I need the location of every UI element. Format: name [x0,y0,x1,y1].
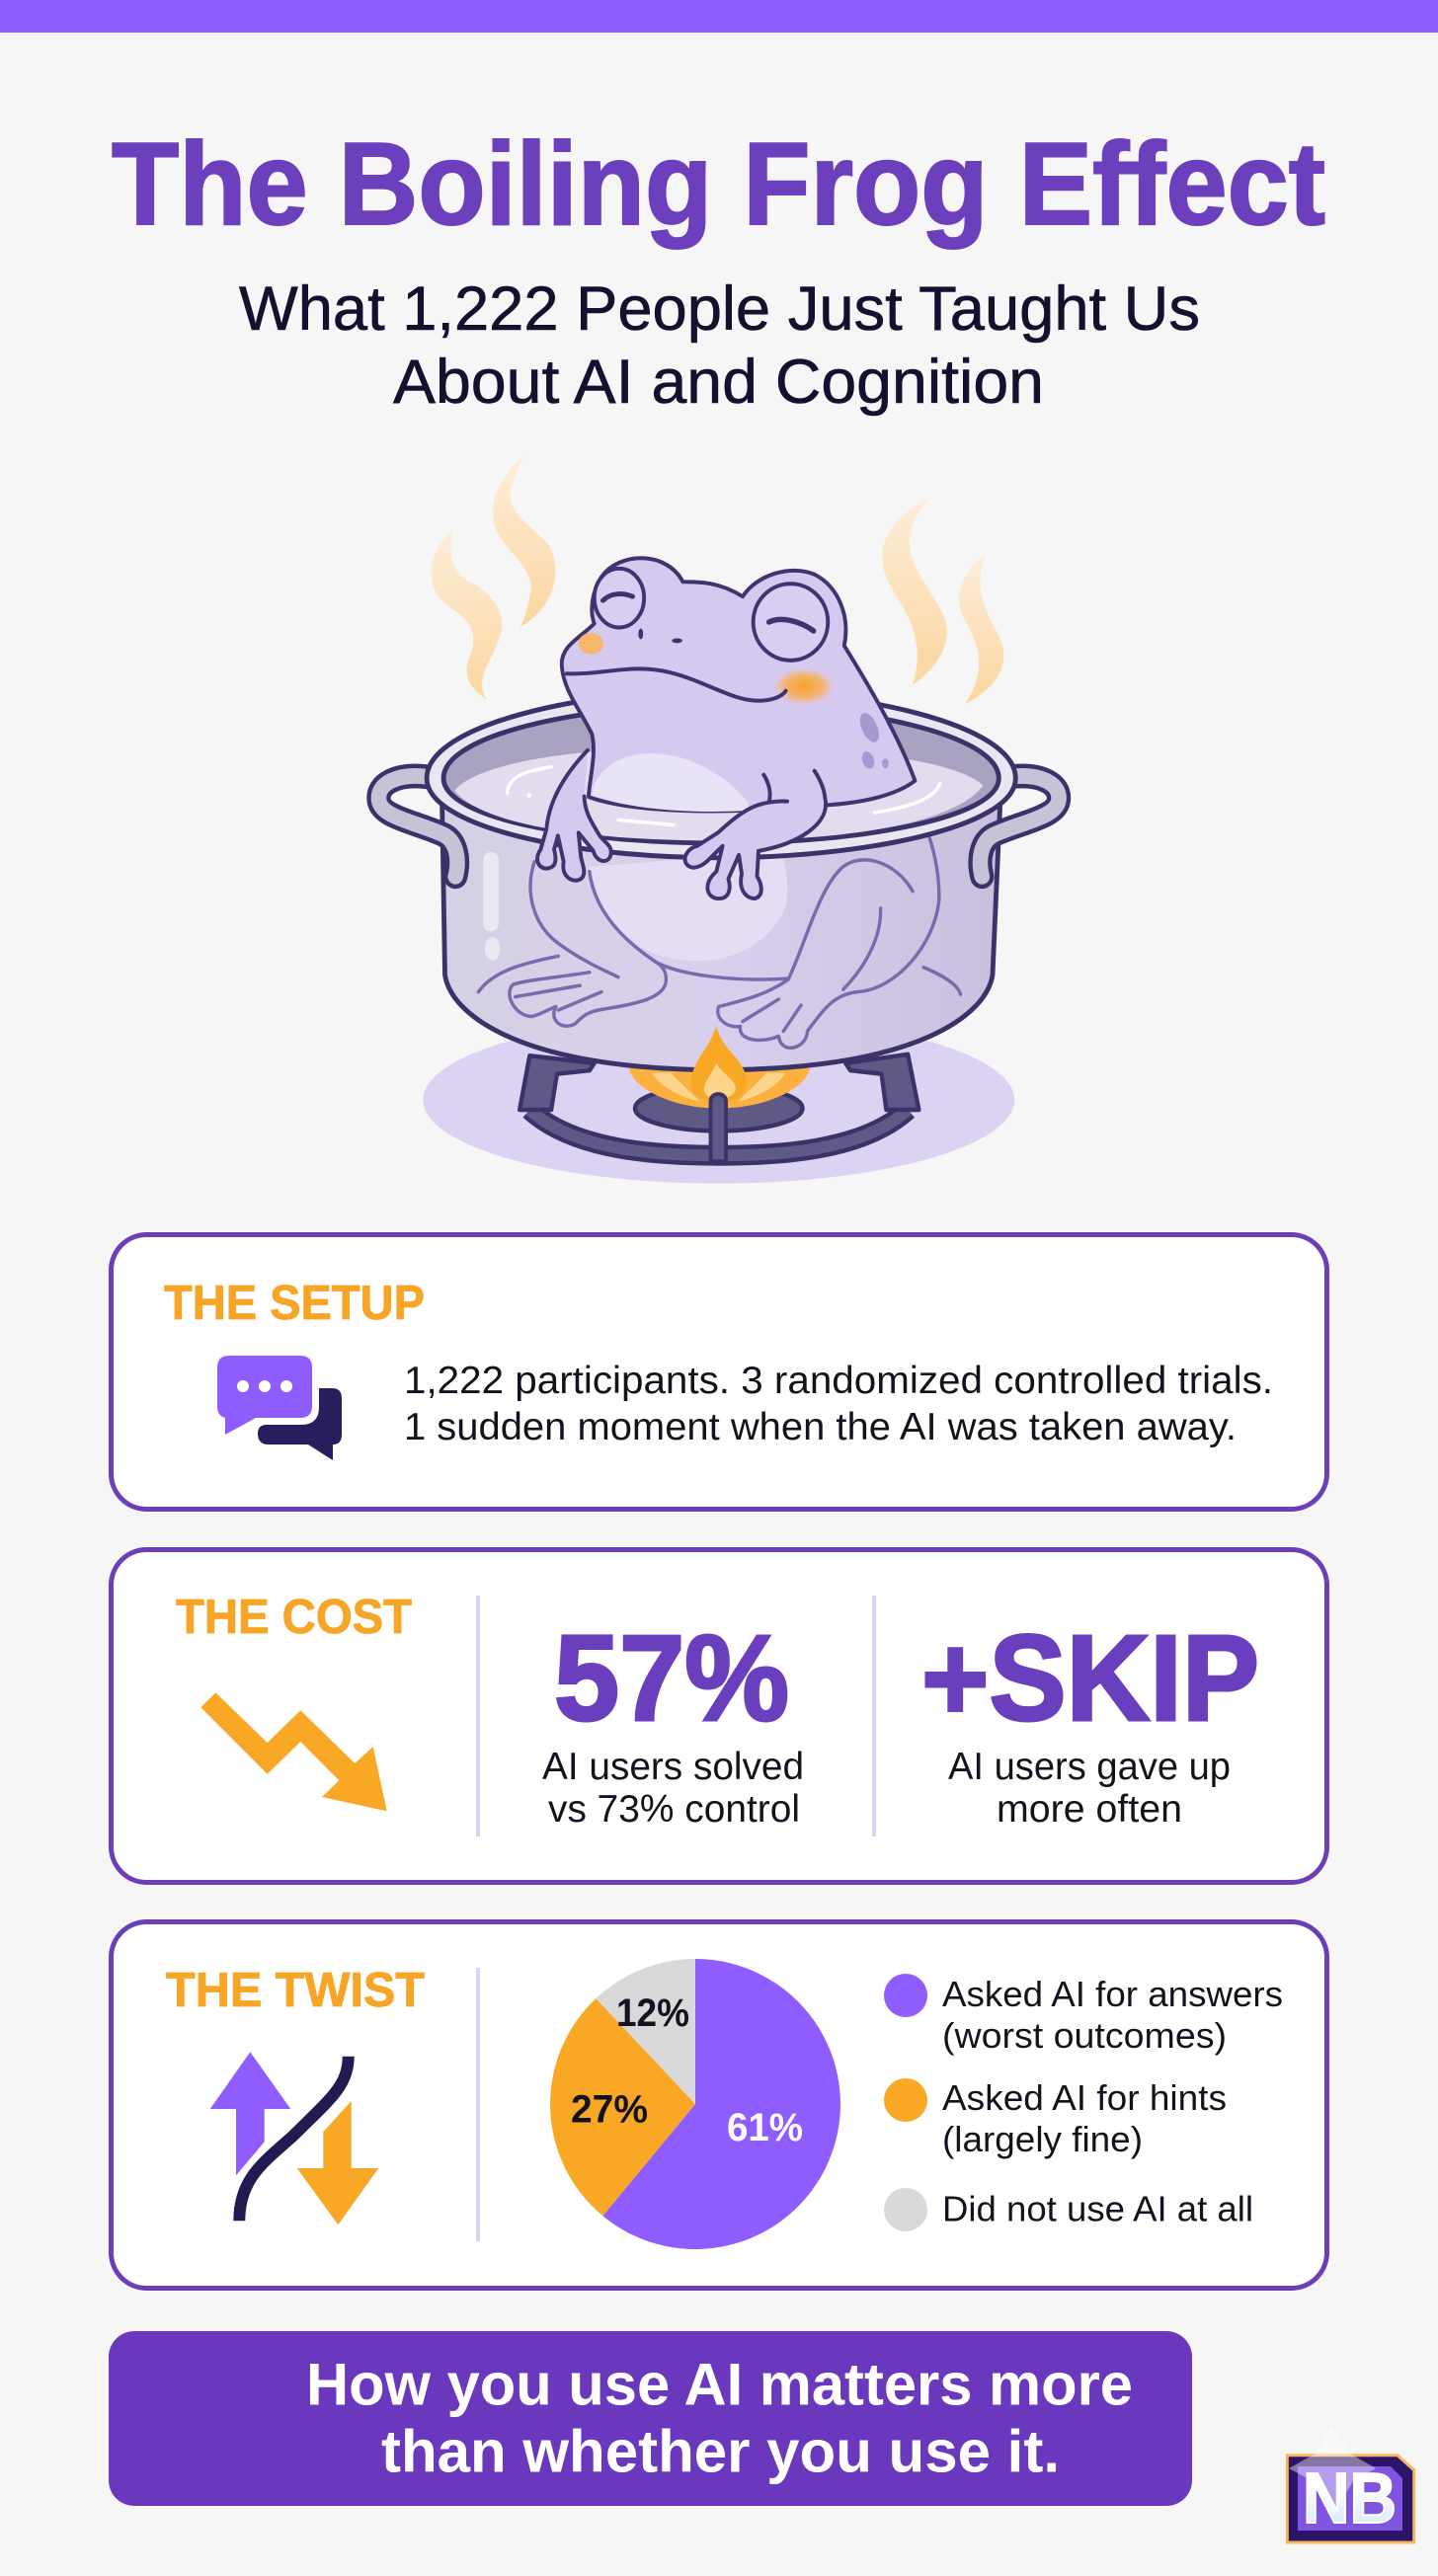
icon: falling zigzag arrow [200,1692,387,1811]
stat: +skip: +SKIP [921,1611,1259,1747]
stat: 57%: vs 73% control [548,1788,800,1831]
frog eyes [595,569,644,627]
heading: the setup: THE SETUP [164,1277,425,1330]
subtitle: What 1,222 People Just Taught Us [239,274,1200,344]
cheeks and spots [773,667,835,705]
stat: 57%: AI users solved [542,1746,804,1788]
frog upper body [537,558,915,898]
banner: conclusion [109,2331,1192,2506]
frog mouth [567,668,786,701]
subtitle: About AI and Cognition [393,348,1044,417]
setup text [404,1360,1273,1448]
pot handles [378,776,1059,877]
pot rim and water [427,690,1015,858]
panel: the twist [111,1921,1327,2289]
panel: the cost [111,1550,1327,1882]
banner: conclusion: How you use AI matters more [306,2352,1133,2418]
left arm [537,750,611,881]
pot body [442,802,1000,1070]
submerged frog [478,837,961,1048]
burner grate [519,1054,919,1155]
setup text: 1 sudden moment when the AI was taken away. [404,1406,1237,1448]
logo: NB badge: NB [1303,2459,1397,2538]
frog belly [592,753,749,812]
top accent bar [0,0,1438,33]
pie chart: 12% [616,1991,689,2035]
burner shadow [423,1016,1014,1184]
pie chart: 27% [571,2087,648,2131]
stat: +skip [921,1611,1259,1831]
pie chart: 61% [727,2106,803,2149]
illustration: frog in a pot on a burner [366,455,1071,1184]
banner: conclusion: than whether you use it. [381,2419,1060,2485]
subtitle [239,274,1200,417]
legend item: answers [884,1974,1283,2056]
legend item: hints: Asked AI for hints [942,2077,1227,2118]
legend item: no AI: Did not use AI at all [942,2188,1253,2229]
flame [691,1026,747,1161]
legend item: answers: Asked AI for answers [942,1974,1283,2014]
pot highlights [483,852,500,961]
legend item: hints [884,2077,1227,2159]
icon: chat bubbles [217,1356,342,1460]
title: The Boiling Frog Effect [112,118,1325,250]
steam wisps [432,455,1003,704]
logo: NB badge [1287,2426,1414,2542]
stat: 57%: 57% [554,1611,789,1747]
legend item: hints: (largely fine) [942,2119,1143,2159]
icon: crossing arrows [210,2052,378,2225]
pie chart [550,1959,840,2249]
setup text: 1,222 participants. 3 randomized controlled trials. [404,1360,1273,1402]
legend item: answers: (worst outcomes) [942,2015,1227,2056]
heading: the twist: THE TWIST [166,1964,425,2017]
right arm [685,771,826,898]
legend [884,1974,1283,2231]
stat: +skip: more often [997,1788,1182,1831]
stat: 57% [542,1611,804,1831]
heading: the cost: THE COST [176,1591,412,1644]
panel: the setup [111,1234,1327,1509]
nostrils [638,628,643,639]
stat: +skip: AI users gave up [948,1746,1231,1788]
